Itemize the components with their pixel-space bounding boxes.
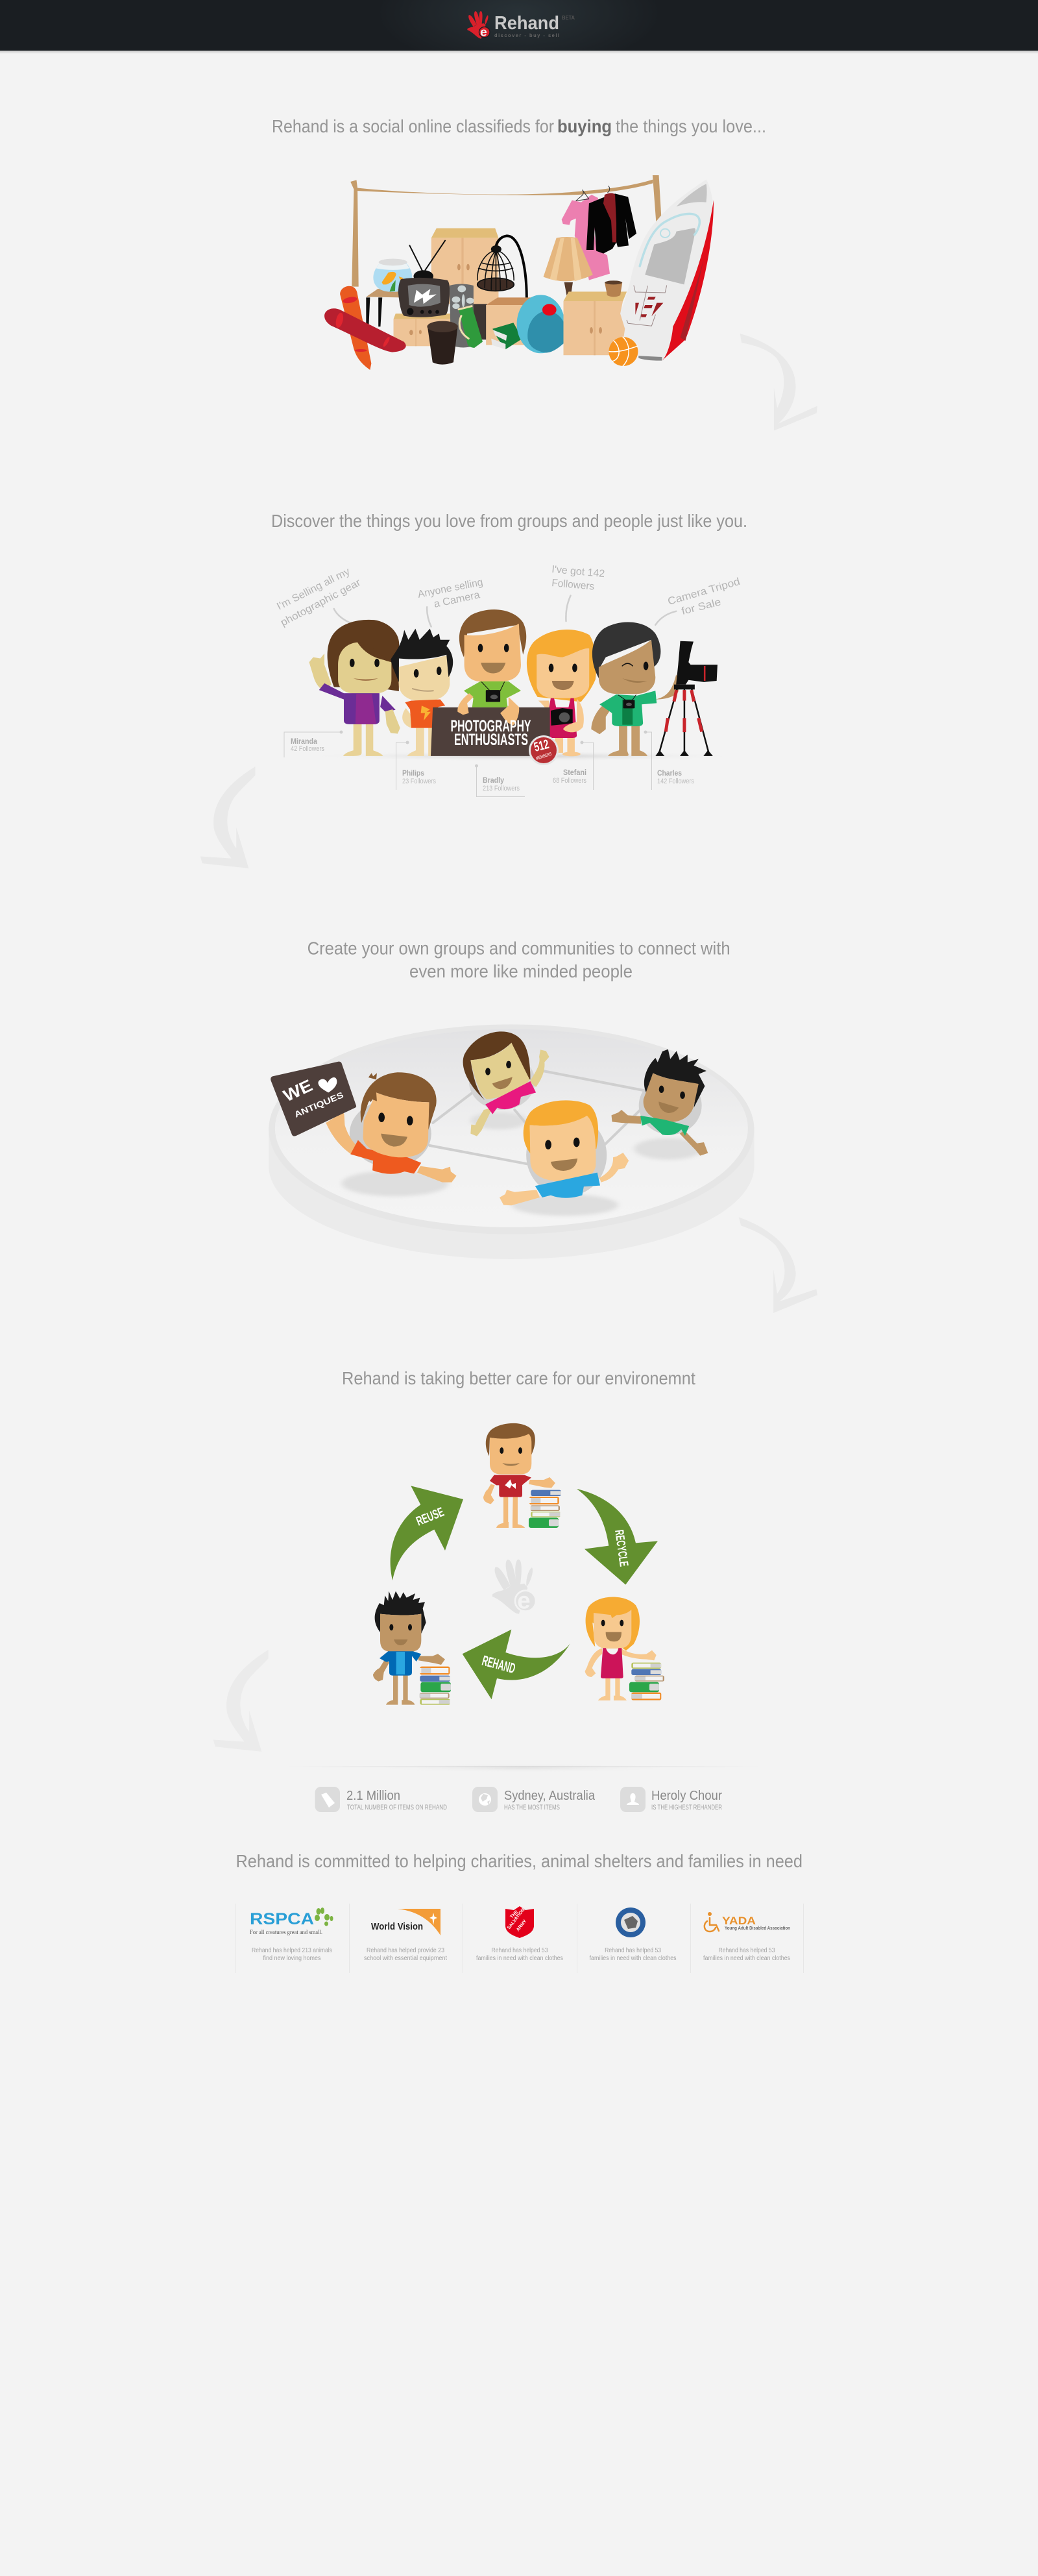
caption: families in need with clean clothes — [476, 1954, 563, 1962]
arrow label: reuse: REUSE — [415, 1505, 446, 1529]
arrow label: recycle: RECYCLE — [612, 1529, 631, 1567]
person: blue shirt — [373, 1591, 445, 1705]
beta tag: BETA — [562, 15, 575, 21]
heading: discover: Discover the things you love from groups and people just like you. — [271, 511, 747, 531]
label: Charles — [644, 731, 694, 790]
caption — [703, 1946, 790, 1962]
person: red shirt — [483, 1423, 555, 1528]
arrow: rehand — [463, 1630, 570, 1699]
label: Stefani: Stefani — [563, 769, 586, 777]
caption — [252, 1946, 332, 1962]
sign text: ANTIQUES — [293, 1090, 345, 1120]
logo: shield: ARMY — [516, 1919, 527, 1932]
hands on sign — [457, 693, 519, 726]
stat: top rehander: Heroly Chour — [651, 1789, 722, 1803]
speech: followers: I've got 142 — [551, 564, 605, 580]
heading: create groups: Create your own groups and communities to connect with — [308, 938, 730, 958]
caption — [590, 1946, 677, 1962]
illustration: recycle cycle — [213, 1423, 664, 1752]
icon: person — [620, 1787, 646, 1812]
speech: tripod: Camera Tripod — [666, 576, 742, 607]
charity: Salvation Army — [476, 1906, 563, 1962]
person: blue shirt — [500, 1100, 629, 1205]
caption: Rehand has helped 53 — [492, 1946, 548, 1954]
caption: Rehand has helped 53 — [719, 1946, 775, 1954]
ground shadow — [302, 751, 743, 761]
clothes rack — [350, 175, 662, 287]
floor lamp — [564, 282, 573, 297]
books: top stack — [529, 1490, 561, 1528]
golf bag — [450, 284, 483, 348]
box, middle — [486, 297, 533, 345]
logo: round seal — [616, 1907, 646, 1937]
speech: anyone selling: Anyone selling — [417, 577, 484, 600]
person: Stefani — [527, 630, 596, 756]
illustration: garage sale items — [324, 175, 714, 370]
watermark hand — [492, 1560, 536, 1614]
green books — [491, 323, 522, 349]
caption: Rehand has helped provide 23 — [367, 1946, 444, 1954]
sign text — [450, 717, 531, 749]
heading: buying: the things you love... — [616, 116, 766, 136]
arrow label: rehand: REHAND — [480, 1652, 517, 1676]
logo: YADA: YADA — [722, 1915, 756, 1927]
arrow: down right — [739, 1218, 817, 1313]
person: pink top — [585, 1597, 657, 1700]
camera on tripod — [655, 641, 718, 756]
photography sign — [431, 707, 550, 756]
speech: tripod: for Sale — [681, 596, 722, 617]
basketball — [609, 337, 638, 366]
speech: tripod — [666, 576, 742, 617]
badge: 512 members: MEMBERS — [535, 752, 553, 761]
sign board — [271, 1062, 356, 1136]
person: pink shirt — [463, 1031, 549, 1136]
label: Stefani: 68 Followers — [553, 777, 586, 785]
label: Charles: Charles — [657, 770, 682, 778]
network lines — [429, 1071, 644, 1164]
arrow: reuse — [391, 1486, 463, 1580]
beach ball — [517, 295, 565, 353]
speech: selling gear: photographic gear — [279, 577, 363, 629]
person: Miranda — [309, 620, 400, 756]
logo: shield: THE — [509, 1909, 520, 1919]
caption: Rehand has helped 213 animals — [252, 1946, 332, 1954]
caption: families in need with clean clothes — [703, 1954, 790, 1962]
fish bowl on table — [366, 259, 412, 326]
snowboards — [324, 286, 406, 370]
stat: top rehander — [620, 1787, 722, 1812]
stat: location — [472, 1787, 596, 1812]
books: right stack — [629, 1663, 664, 1700]
watermark hand: e — [517, 1587, 531, 1613]
charity: World Vision — [364, 1909, 447, 1962]
logo: YADA — [705, 1912, 790, 1932]
stat: total items: TOTAL NUMBER OF ITEMS ON REHAND — [347, 1804, 447, 1811]
sign text: WE — [280, 1075, 315, 1105]
illustration: photography group — [200, 564, 743, 868]
divider — [285, 1763, 761, 1773]
label: Philips: Philips — [402, 770, 424, 778]
label: Miranda: 42 Followers — [291, 745, 324, 753]
speech: anyone selling — [417, 577, 484, 610]
charity: St Vincent — [590, 1907, 677, 1962]
logo: RSPCA — [250, 1907, 333, 1935]
lamp shade — [544, 237, 593, 281]
arrow: down left — [200, 767, 256, 868]
heading: create groups — [308, 938, 730, 981]
birdcage — [477, 236, 527, 297]
heading: create groups: even more like minded people — [409, 961, 633, 981]
pink dress — [562, 195, 610, 280]
soft shadows — [342, 1112, 703, 1216]
arrow: faint down left — [213, 1650, 269, 1752]
heading: buying — [272, 116, 766, 136]
heart on sign — [318, 1077, 337, 1092]
person: orange shirt with sign — [326, 1072, 457, 1183]
icon: price tag — [315, 1787, 340, 1812]
dark box — [472, 304, 487, 339]
arrow: recycle — [577, 1489, 658, 1585]
heading: environment: Rehand is taking better care for our environemnt — [342, 1368, 695, 1388]
caption: school with essential equipment — [364, 1954, 447, 1962]
black jacket — [576, 186, 636, 254]
caption: families in need with clean clothes — [590, 1954, 677, 1962]
wardrobe, back — [431, 228, 498, 304]
label: Bradly: 213 Followers — [483, 785, 520, 792]
stat: total items — [315, 1787, 447, 1812]
stat: location: Sydney, Australia — [504, 1789, 596, 1803]
badge: 512 members — [529, 735, 559, 765]
logo: YADA: Young Adult Disabled Association — [725, 1926, 790, 1931]
heading: buying: Rehand is a social online classifieds for — [272, 116, 554, 136]
caption — [364, 1946, 447, 1962]
caption: find new loving homes — [263, 1954, 320, 1962]
header bar — [0, 0, 1038, 54]
surfboard — [620, 180, 714, 361]
label: Stefani — [553, 741, 593, 790]
label: Miranda: Miranda — [291, 738, 318, 746]
logo: RSPCA: For all creatures great and small. — [250, 1929, 322, 1935]
icon: globe — [472, 1787, 498, 1812]
platform — [269, 1024, 754, 1259]
speech: followers: Followers — [551, 578, 595, 593]
speech: anyone selling: a Camera — [433, 589, 481, 610]
stat: location: HAS THE MOST ITEMS — [504, 1804, 560, 1811]
sign text: PHOTOGRAPHY — [450, 717, 531, 735]
charity grid separators — [235, 1904, 803, 1973]
arrow: down right — [740, 334, 817, 431]
sign text — [280, 1075, 345, 1120]
stat: total items: 2.1 Million — [346, 1789, 400, 1803]
logo tagline: discover - buy - sell — [494, 32, 559, 38]
label: Philips — [396, 741, 436, 790]
logo: World Vision: World Vision — [371, 1921, 423, 1932]
icon: red hand — [467, 11, 490, 39]
label: Bradly: Bradly — [483, 777, 505, 785]
logo: shield: SALVATION — [507, 1907, 526, 1930]
stat: top rehander: IS THE HIGHEST REHANDER — [651, 1804, 722, 1811]
person: Bradly — [459, 609, 526, 707]
heading: buying: buying — [557, 116, 612, 136]
logo: shield — [505, 1906, 534, 1938]
charity: RSPCA — [250, 1907, 333, 1962]
person: Charles — [591, 622, 681, 756]
label: Charles: 142 Followers — [657, 778, 694, 785]
speech: followers — [551, 564, 605, 593]
books: left stack — [420, 1667, 451, 1705]
speech leaders — [334, 596, 676, 627]
logo: RSPCA: RSPCA — [250, 1910, 314, 1928]
logo — [467, 11, 575, 39]
person: Philips — [391, 629, 453, 756]
label: Bradly — [475, 765, 525, 797]
icon: red hand: e — [480, 25, 487, 38]
wardrobe, small — [394, 313, 452, 346]
speech: selling gear: I'm Selling all my — [275, 566, 352, 613]
label: Miranda — [284, 731, 343, 757]
television — [398, 241, 450, 317]
person: green shirt — [612, 1049, 708, 1156]
illustration: community platform — [269, 1024, 754, 1259]
badge: 512 members: 512 — [533, 737, 551, 755]
caption: Rehand has helped 53 — [605, 1946, 661, 1954]
dark cup — [427, 321, 458, 365]
heading: charities: Rehand is committed to helping charities, animal shelters and families in need — [236, 1851, 803, 1871]
charity: YADA — [703, 1912, 790, 1962]
wardrobe, front — [563, 280, 627, 355]
caption — [476, 1946, 563, 1962]
label: Philips: 23 Followers — [402, 778, 436, 785]
logo wordmark: Rehand — [494, 13, 559, 34]
sign text: ENTHUSIASTS — [454, 731, 528, 749]
